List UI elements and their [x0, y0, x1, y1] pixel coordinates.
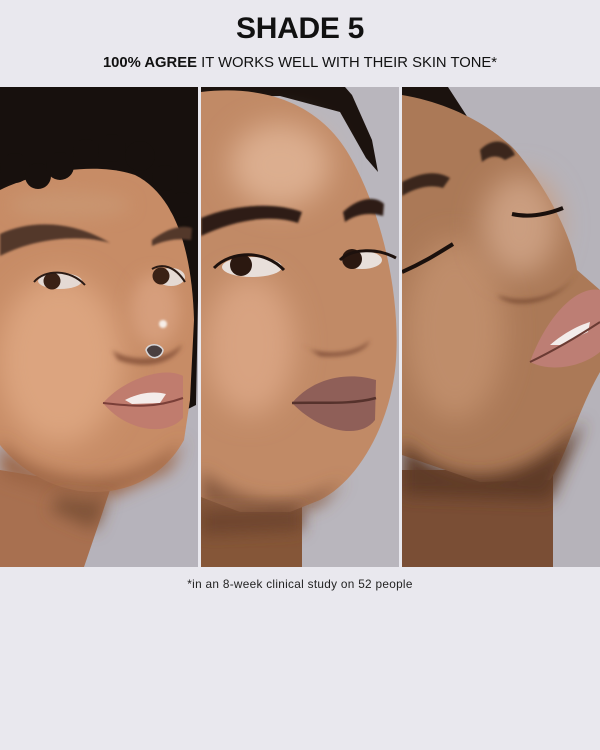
- portrait: right face: [402, 87, 600, 567]
- subtitle: agreement statistic: 100% AGREE IT WORKS WELL WITH THEIR SKIN TONE*: [103, 55, 497, 71]
- portrait: centre face: [201, 87, 399, 567]
- curls along the hairline: [16, 170, 172, 213]
- photo strip: three portraits: [0, 87, 600, 567]
- title: SHADE 5: [236, 12, 364, 45]
- portrait: left face: [0, 87, 198, 567]
- footnote: *in an 8-week clinical study on 52 people: [187, 577, 413, 591]
